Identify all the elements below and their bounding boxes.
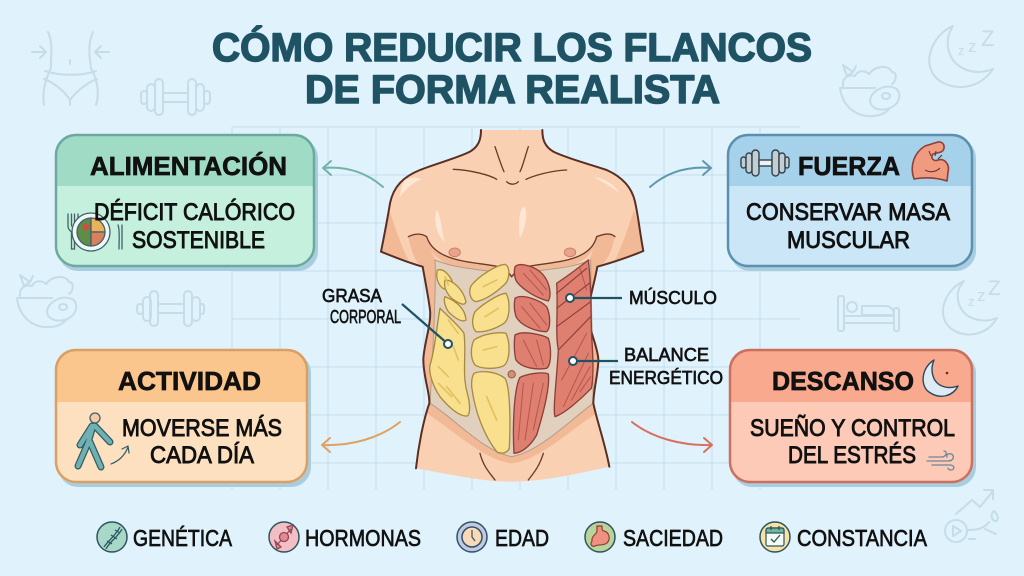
outline bbox=[381, 130, 643, 468]
background icon: bed bbox=[838, 296, 899, 331]
title bbox=[212, 24, 812, 112]
arrow: to alimentación bbox=[323, 161, 383, 187]
footer factor: saciedad bbox=[585, 522, 723, 552]
text: sueño y control del estrés: SUEÑO Y CONTROL bbox=[750, 415, 955, 442]
background icon: growth chart and play bbox=[945, 490, 998, 542]
footer factor: saciedad: SACIEDAD bbox=[623, 525, 723, 551]
background icon: moon top right: z bbox=[958, 43, 964, 58]
label: músculo: MÚSCULO bbox=[629, 287, 717, 308]
background icon: dumbbell top bbox=[141, 79, 210, 115]
footer factor: edad bbox=[457, 522, 549, 552]
text: déficit calórico sostenible: DÉFICIT CALÓRICO bbox=[94, 199, 295, 226]
icon: flexed arm bbox=[912, 142, 948, 181]
text: moverse más cada día: CADA DÍA bbox=[150, 442, 254, 469]
background icon: dumbbell left bbox=[137, 291, 204, 326]
icon: plate with cutlery bbox=[68, 213, 122, 251]
anatomy details bbox=[408, 147, 615, 480]
text: moverse más cada día: MOVERSE MÁS bbox=[122, 415, 282, 442]
icon: calendar check bbox=[760, 522, 790, 552]
icon: moon bbox=[923, 360, 958, 396]
background icon: moon top right bbox=[929, 26, 994, 87]
label: grasa corporal: CORPORAL bbox=[330, 307, 401, 327]
background icon: moon right: z bbox=[977, 286, 986, 305]
muscle layer: right side and abs bbox=[513, 260, 593, 453]
icon: dna bbox=[97, 522, 127, 552]
footer factor: edad: EDAD bbox=[495, 525, 549, 551]
title: DE FORMA REALISTA bbox=[305, 68, 720, 112]
background icon: waist bbox=[32, 32, 109, 105]
text: conservar masa muscular: MUSCULAR bbox=[787, 227, 910, 254]
arrow: to descanso bbox=[632, 422, 712, 452]
torso illustration bbox=[381, 130, 643, 482]
background icon: food bowl top right bbox=[840, 65, 899, 116]
highlights bbox=[400, 177, 620, 242]
footer factor: hormonas: HORMONAS bbox=[305, 525, 421, 551]
icon: stomach bbox=[585, 522, 615, 552]
heading: alimentación: ALIMENTACIÓN bbox=[90, 151, 287, 181]
panel: actividad bbox=[55, 349, 311, 487]
background icon: food bowl left bbox=[17, 275, 76, 327]
text: moverse más cada día bbox=[122, 415, 282, 469]
text: conservar masa muscular: CONSERVAR MASA bbox=[746, 199, 950, 226]
background icon: moon top right: Z bbox=[981, 26, 994, 51]
background icon: moon right: Z bbox=[988, 277, 1001, 300]
icon: hormone molecule bbox=[269, 522, 299, 552]
text: sueño y control del estrés bbox=[750, 415, 955, 469]
background icon: moon right bbox=[943, 277, 1001, 334]
label: balance energético: BALANCE bbox=[624, 345, 709, 365]
heading: actividad: ACTIVIDAD bbox=[118, 366, 261, 396]
text: sueño y control del estrés: DEL ESTRÉS bbox=[788, 442, 916, 469]
icon: wind bbox=[927, 451, 954, 470]
footer factor: genética bbox=[97, 522, 233, 552]
abdominal wall bbox=[430, 260, 593, 457]
panel: alimentación bbox=[55, 134, 318, 271]
footer factor: constancia: CONSTANCIA bbox=[797, 525, 928, 551]
background icon: moon top right: z bbox=[968, 37, 976, 56]
icon: dumbbell bbox=[741, 150, 789, 176]
fat layer: left side and abs bbox=[430, 264, 510, 453]
title: CÓMO REDUCIR LOS FLANCOS bbox=[212, 24, 812, 70]
label: grasa corporal: GRASA bbox=[322, 286, 382, 306]
arrow: to actividad bbox=[322, 422, 400, 452]
arrow: to fuerza bbox=[650, 161, 711, 187]
footer factor: genética: GENÉTICA bbox=[133, 525, 233, 551]
heading: descanso: DESCANSO bbox=[772, 366, 914, 396]
icon: clock bbox=[457, 522, 487, 552]
skin bbox=[381, 130, 643, 482]
footer factor: hormonas bbox=[269, 522, 421, 552]
label: grasa corporal bbox=[322, 286, 452, 348]
skin shading bbox=[381, 210, 643, 463]
background icon: moon right: z bbox=[968, 294, 974, 309]
label: balance energético: ENERGÉTICO bbox=[609, 368, 723, 388]
panel: fuerza bbox=[727, 134, 976, 271]
panel: descanso bbox=[729, 349, 976, 487]
text: déficit calórico sostenible: SOSTENIBLE bbox=[132, 227, 265, 254]
footer factor: constancia bbox=[760, 522, 928, 552]
label: músculo bbox=[566, 287, 717, 308]
label: balance energético bbox=[569, 345, 723, 388]
heading: fuerza: FUERZA bbox=[798, 151, 900, 181]
nipples bbox=[449, 248, 460, 257]
icon: walking person bbox=[78, 413, 129, 467]
text: conservar masa muscular bbox=[746, 199, 950, 254]
text: déficit calórico sostenible bbox=[94, 199, 295, 254]
